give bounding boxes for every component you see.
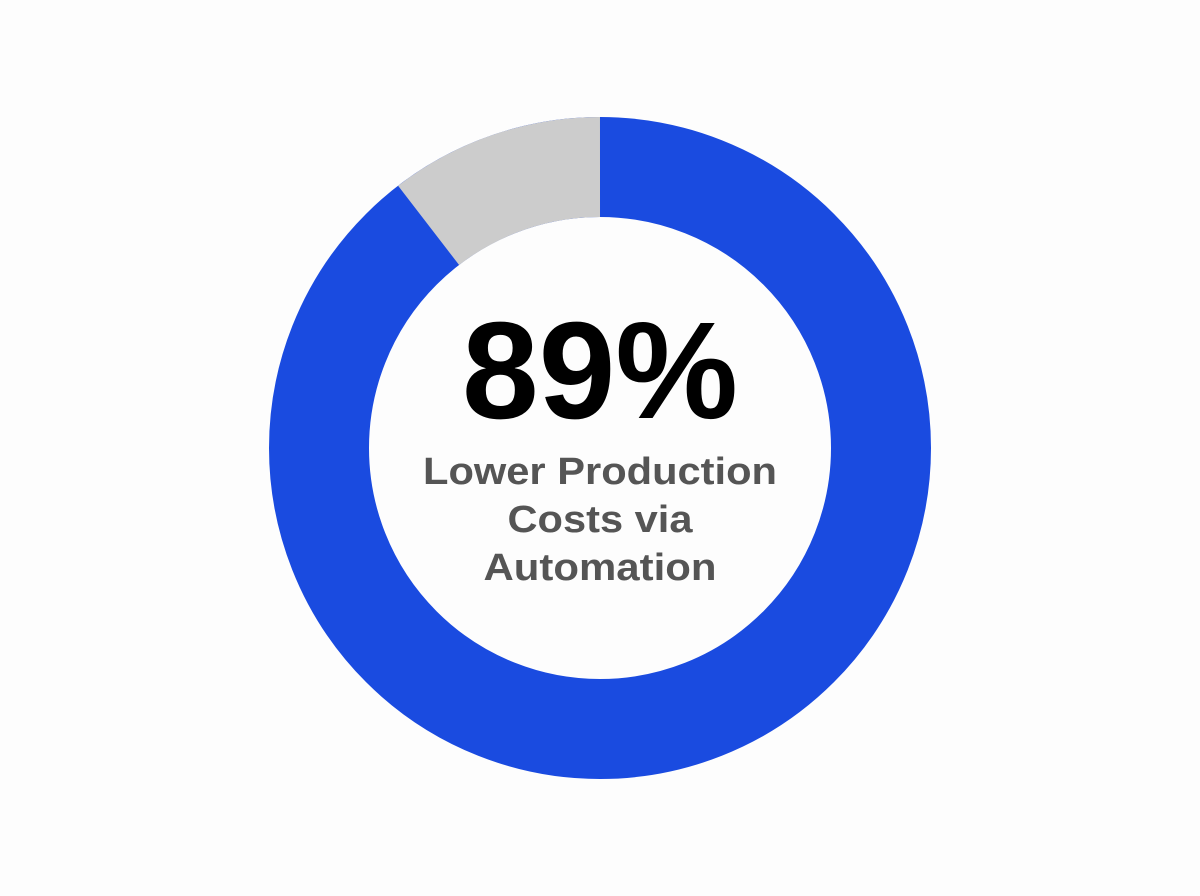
segment: 89% blue (319, 167, 881, 729)
label text: Costs via (508, 499, 693, 541)
label text (423, 451, 777, 589)
big percentage: 89% (462, 294, 738, 448)
label text: Lower Production (423, 451, 777, 493)
segment: 11% gray (429, 167, 600, 225)
donut chart (319, 167, 881, 729)
label text: Automation (484, 547, 716, 589)
